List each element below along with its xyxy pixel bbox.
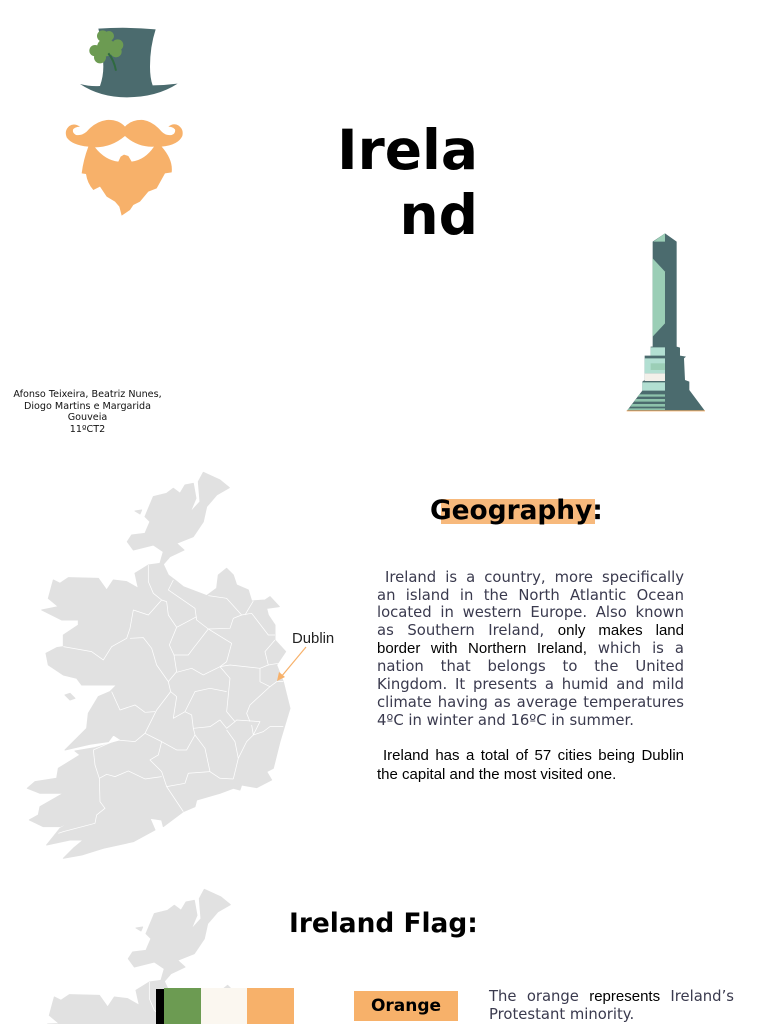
Dublin label: Dublin	[292, 631, 334, 647]
geography text block: nation that belongs to the United	[377, 658, 684, 675]
geography text block: located in western Europe. Also known	[377, 604, 684, 621]
geography text block: Ireland has a total of 57 cities being Dublin	[383, 747, 684, 764]
orange description: Protestant minority.	[489, 1006, 634, 1023]
orange label	[354, 991, 458, 1021]
orange description: The orange represents Ireland’s	[489, 988, 734, 1005]
orange label: Orange	[371, 996, 441, 1016]
geography text block: Ireland is a country, more specifically	[385, 569, 684, 586]
geography text block: 4ºC in winter and 16ºC in summer.	[377, 712, 634, 729]
title: nd	[399, 183, 478, 247]
title: Irela	[337, 118, 478, 182]
geography text block: border with Northern Ireland, which is a	[377, 640, 684, 657]
icon: orange moustache and beard	[66, 120, 183, 216]
geography text block: climate having as average temperatures	[377, 694, 684, 711]
map of Ireland with counties	[27, 472, 290, 858]
heading: Geography: Geography:	[430, 495, 603, 526]
geography text block: an island in the North Atlantic Ocean	[377, 587, 684, 604]
Dublin arrow	[277, 647, 306, 681]
authors credit: Diogo Martins e Margarida	[24, 400, 151, 412]
geography text block: the capital and the most visited one.	[377, 766, 616, 783]
icon: obelisk monument	[627, 233, 705, 411]
orange description	[488, 988, 734, 1023]
flag of Ireland	[156, 988, 294, 1024]
icon: top hat with shamrock	[80, 28, 178, 97]
title	[337, 118, 478, 247]
heading: Ireland Flag: Ireland Flag:	[289, 908, 478, 939]
map of Ireland (lower, behind flag)	[48, 889, 277, 1024]
authors credit: Gouveia	[68, 412, 107, 423]
authors credit: Afonso Teixeira, Beatriz Nunes,	[13, 389, 162, 400]
geography text block	[377, 569, 684, 783]
authors credit	[13, 389, 162, 434]
geography text block: as Southern Ireland, only makes land	[377, 622, 684, 639]
authors credit: 11ºCT2	[70, 424, 105, 434]
geography text block: Kingdom. It presents a humid and mild	[377, 676, 684, 693]
